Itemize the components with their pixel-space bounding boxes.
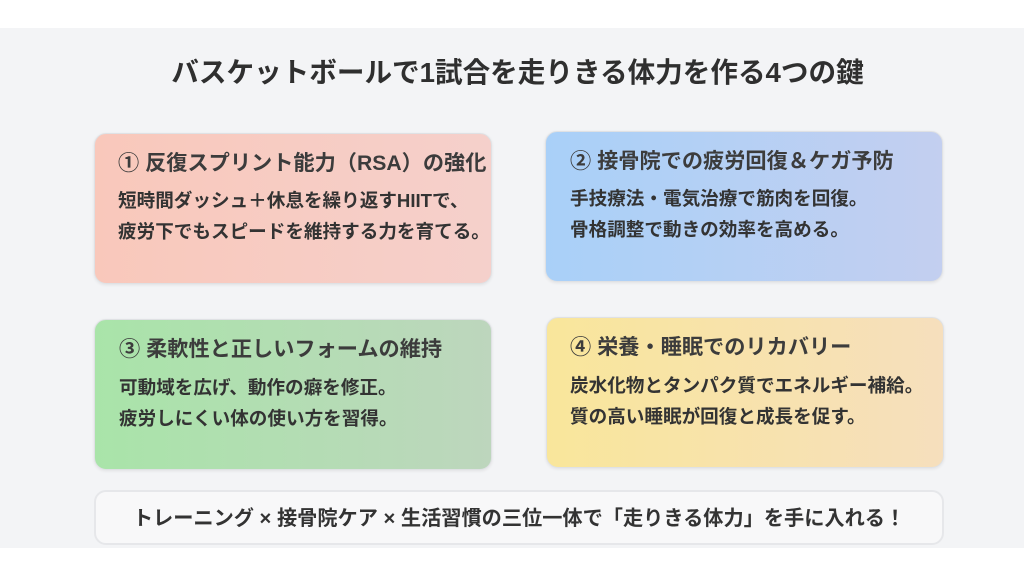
panel text 4	[570, 375, 923, 427]
panel text 2: 骨格調整で動きの効率を高める。	[570, 219, 849, 240]
panel: flexibility and form	[94, 319, 492, 470]
panel text 4: 質の高い睡眠が回復と成長を促す。	[570, 406, 866, 427]
panel: repeated sprint ability	[94, 133, 492, 284]
panel: nutrition and sleep	[546, 317, 944, 468]
panel text 3	[119, 377, 398, 429]
panel text 2: 手技療法・電気治療で筋肉を回復。	[570, 188, 868, 209]
panel text 2	[570, 188, 868, 240]
callout: summary	[94, 490, 944, 545]
callout: summary: トレーニング × 接骨院ケア × 生活習慣の三位一体で「走りきる体力」を手に入れる！	[133, 508, 905, 530]
panel text 1	[118, 190, 490, 242]
panel text 3: 疲労しにくい体の使い方を習得。	[119, 408, 398, 429]
panel text 1: 疲労下でもスピードを維持する力を育てる。	[118, 221, 490, 242]
panel text 1: 短時間ダッシュ＋休息を繰り返すHIITで、	[118, 190, 468, 211]
panel heading 4: ④ 栄養・睡眠でのリカバリー	[570, 336, 851, 359]
panel heading 1: ① 反復スプリント能力（RSA）の強化	[118, 152, 486, 175]
panel text 4: 炭水化物とタンパク質でエネルギー補給。	[570, 375, 923, 396]
panel: osteopathic recovery	[545, 131, 943, 282]
panel heading 2: ② 接骨院での疲労回復＆ケガ予防	[570, 150, 894, 173]
panel text 3: 可動域を広げ、動作の癖を修正。	[119, 377, 397, 398]
title: バスケットボールで1試合を走りきる体力を作る4つの鍵	[171, 57, 864, 88]
panel heading 3: ③ 柔軟性と正しいフォームの維持	[119, 338, 442, 361]
